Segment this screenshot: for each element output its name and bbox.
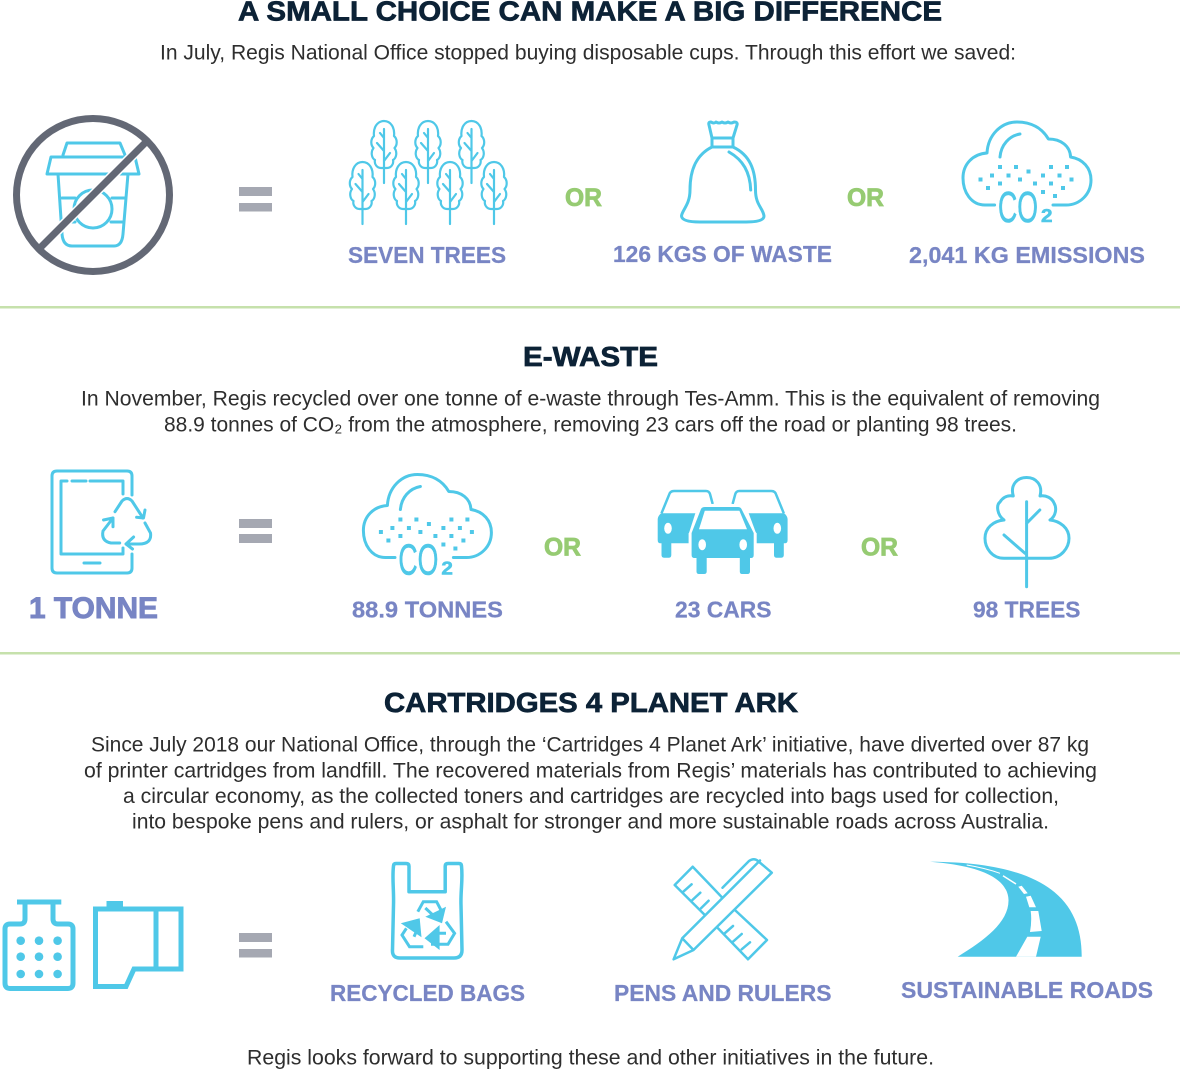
label: sustainable roads: SUSTAINABLE ROADS xyxy=(901,977,1153,1003)
icon: seven trees xyxy=(350,121,507,224)
label: seven trees: SEVEN TREES xyxy=(348,242,506,268)
label: waste: 126 KGS OF WASTE xyxy=(613,241,832,267)
icon: recycled bag xyxy=(392,864,462,958)
icon: tablet with recycling arrows xyxy=(52,471,151,573)
icon: toner cartridge xyxy=(96,901,181,986)
icon: three cars xyxy=(658,491,788,574)
equals sign xyxy=(239,933,272,958)
or: OR xyxy=(861,534,898,562)
body text: into bespoke pens and rulers, or asphalt for stronger and more sustainable roads across Australia. xyxy=(132,810,1049,834)
icon: CO2 cloud: 2 xyxy=(1041,206,1052,226)
icon: crossed-out coffee cup xyxy=(16,118,170,272)
label: trees: 98 TREES xyxy=(973,596,1080,622)
icon: CO2 cloud: 2 xyxy=(441,558,453,578)
body text xyxy=(84,732,1097,834)
body text: In November, Regis recycled over one tonne of e-waste through Tes-Amm. This is the equivalent of removing xyxy=(81,386,1100,410)
icon: pen and ruler xyxy=(674,859,772,959)
intro text: In July, Regis National Office stopped buying disposable cups. Through this effort we saved: xyxy=(160,40,1016,64)
icon: waste sack xyxy=(682,122,764,222)
closing statement: Regis looks forward to supporting these and other initiatives in the future. xyxy=(247,1046,934,1069)
heading: E-WASTE xyxy=(523,341,658,372)
label: emissions: 2,041 KG EMISSIONS xyxy=(909,242,1145,268)
label: one tonne: 1 TONNE xyxy=(29,592,158,625)
panel: disposable cups xyxy=(16,0,1145,272)
icon: road xyxy=(930,862,1082,957)
icon: CO2 cloud: CO xyxy=(998,183,1038,232)
icon: CO2 cloud: CO xyxy=(398,536,438,584)
icon: CO2 cloud xyxy=(963,122,1091,232)
body text: Since July 2018 our National Office, through the ‘Cartridges 4 Planet Ark’ initiative, have diverted over 87 kg xyxy=(91,732,1089,756)
body text: 88.9 tonnes of CO₂ from the atmosphere, removing 23 cars off the road or planting 98 trees. xyxy=(164,412,1017,436)
heading: CARTRIDGES 4 PLANET ARK xyxy=(384,687,798,718)
panel: e-waste xyxy=(29,341,1100,625)
label: cars: 23 CARS xyxy=(675,596,772,622)
or: OR xyxy=(544,534,581,562)
or: OR xyxy=(847,184,884,212)
label: recycled bags: RECYCLED BAGS xyxy=(330,980,525,1006)
icon: ink cartridge with nozzles xyxy=(5,902,73,988)
label: pens and rulers: PENS AND RULERS xyxy=(614,980,832,1006)
or: OR xyxy=(565,184,602,212)
body text: of printer cartridges from landfill. The recovered materials from Regis’ materials has contributed to achieving xyxy=(84,758,1097,782)
icon: CO2 cloud xyxy=(363,474,491,584)
icon: tree xyxy=(985,478,1069,587)
panel: cartridges xyxy=(5,687,1153,1069)
equals sign xyxy=(239,187,272,212)
body text: a circular economy, as the collected toners and cartridges are recycled into bags used for collection, xyxy=(123,784,1059,808)
body text xyxy=(81,386,1100,436)
label: tonnes: 88.9 TONNES xyxy=(352,596,503,622)
equals sign xyxy=(239,519,272,543)
